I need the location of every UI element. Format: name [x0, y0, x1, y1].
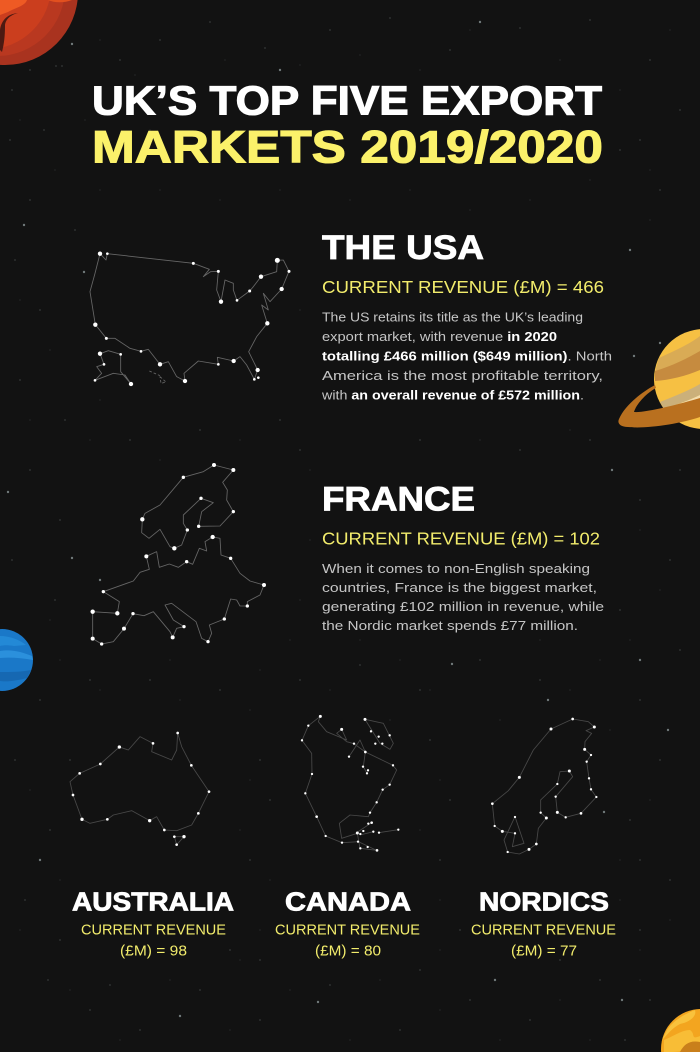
text block: france: When it comes to non-English speaking — [322, 561, 590, 576]
heading: the usa: THE USA — [322, 229, 484, 267]
text block: the usa — [321, 310, 612, 402]
text block: the usa: export market, with revenue in 2020 — [322, 329, 557, 344]
text block: the usa: with an overall revenue of £572 million . — [321, 388, 584, 402]
title: UK’S TOP FIVE EXPORT — [92, 78, 602, 124]
decorative planet: blue planet — [0, 629, 33, 691]
constellation map: USA — [90, 251, 290, 386]
constellation map: australia — [70, 732, 210, 846]
revenue: france: CURRENT REVENUE (£M) = 102 — [322, 528, 600, 548]
text block: france — [322, 561, 604, 633]
revenue: the usa: CURRENT REVENUE (£M) = 466 — [322, 277, 604, 297]
label: canada: (£M) = 80 — [315, 944, 381, 960]
constellation map: france and europe — [90, 463, 266, 646]
label: australia — [72, 886, 234, 960]
text block: the usa: America is the most profitable territory, — [322, 368, 603, 383]
decorative planet: orange planet bottom right — [661, 1009, 700, 1052]
constellation map: nordics — [491, 718, 597, 854]
label: australia: CURRENT REVENUE — [81, 922, 226, 938]
constellation map: canada — [301, 715, 399, 852]
title — [92, 78, 603, 172]
decorative planet: red planet top left — [0, 0, 78, 65]
text block: the usa: The US retains its title as the UK’s leading — [322, 310, 583, 324]
text block: the usa: totalling £466 million ($649 million) . North — [322, 348, 612, 364]
label: australia: (£M) = 98 — [120, 944, 187, 960]
text block: france: the Nordic market spends £77 million. — [322, 618, 578, 633]
label: canada: CURRENT REVENUE — [275, 922, 420, 938]
label: canada: CANADA — [285, 886, 411, 916]
label: canada — [275, 886, 420, 960]
label: nordics: CURRENT REVENUE — [471, 922, 616, 938]
title: MARKETS 2019/2020 — [92, 122, 603, 172]
label: australia: AUSTRALIA — [72, 886, 234, 916]
label: nordics: NORDICS — [479, 886, 609, 916]
label: nordics — [471, 886, 616, 960]
heading: france: FRANCE — [322, 480, 475, 518]
decorative planet: ringed planet — [618, 329, 700, 429]
label: nordics: (£M) = 77 — [511, 944, 577, 960]
text block: france: countries, France is the biggest market, — [322, 580, 597, 595]
text block: france: generating £102 million in revenue, while — [322, 599, 604, 614]
